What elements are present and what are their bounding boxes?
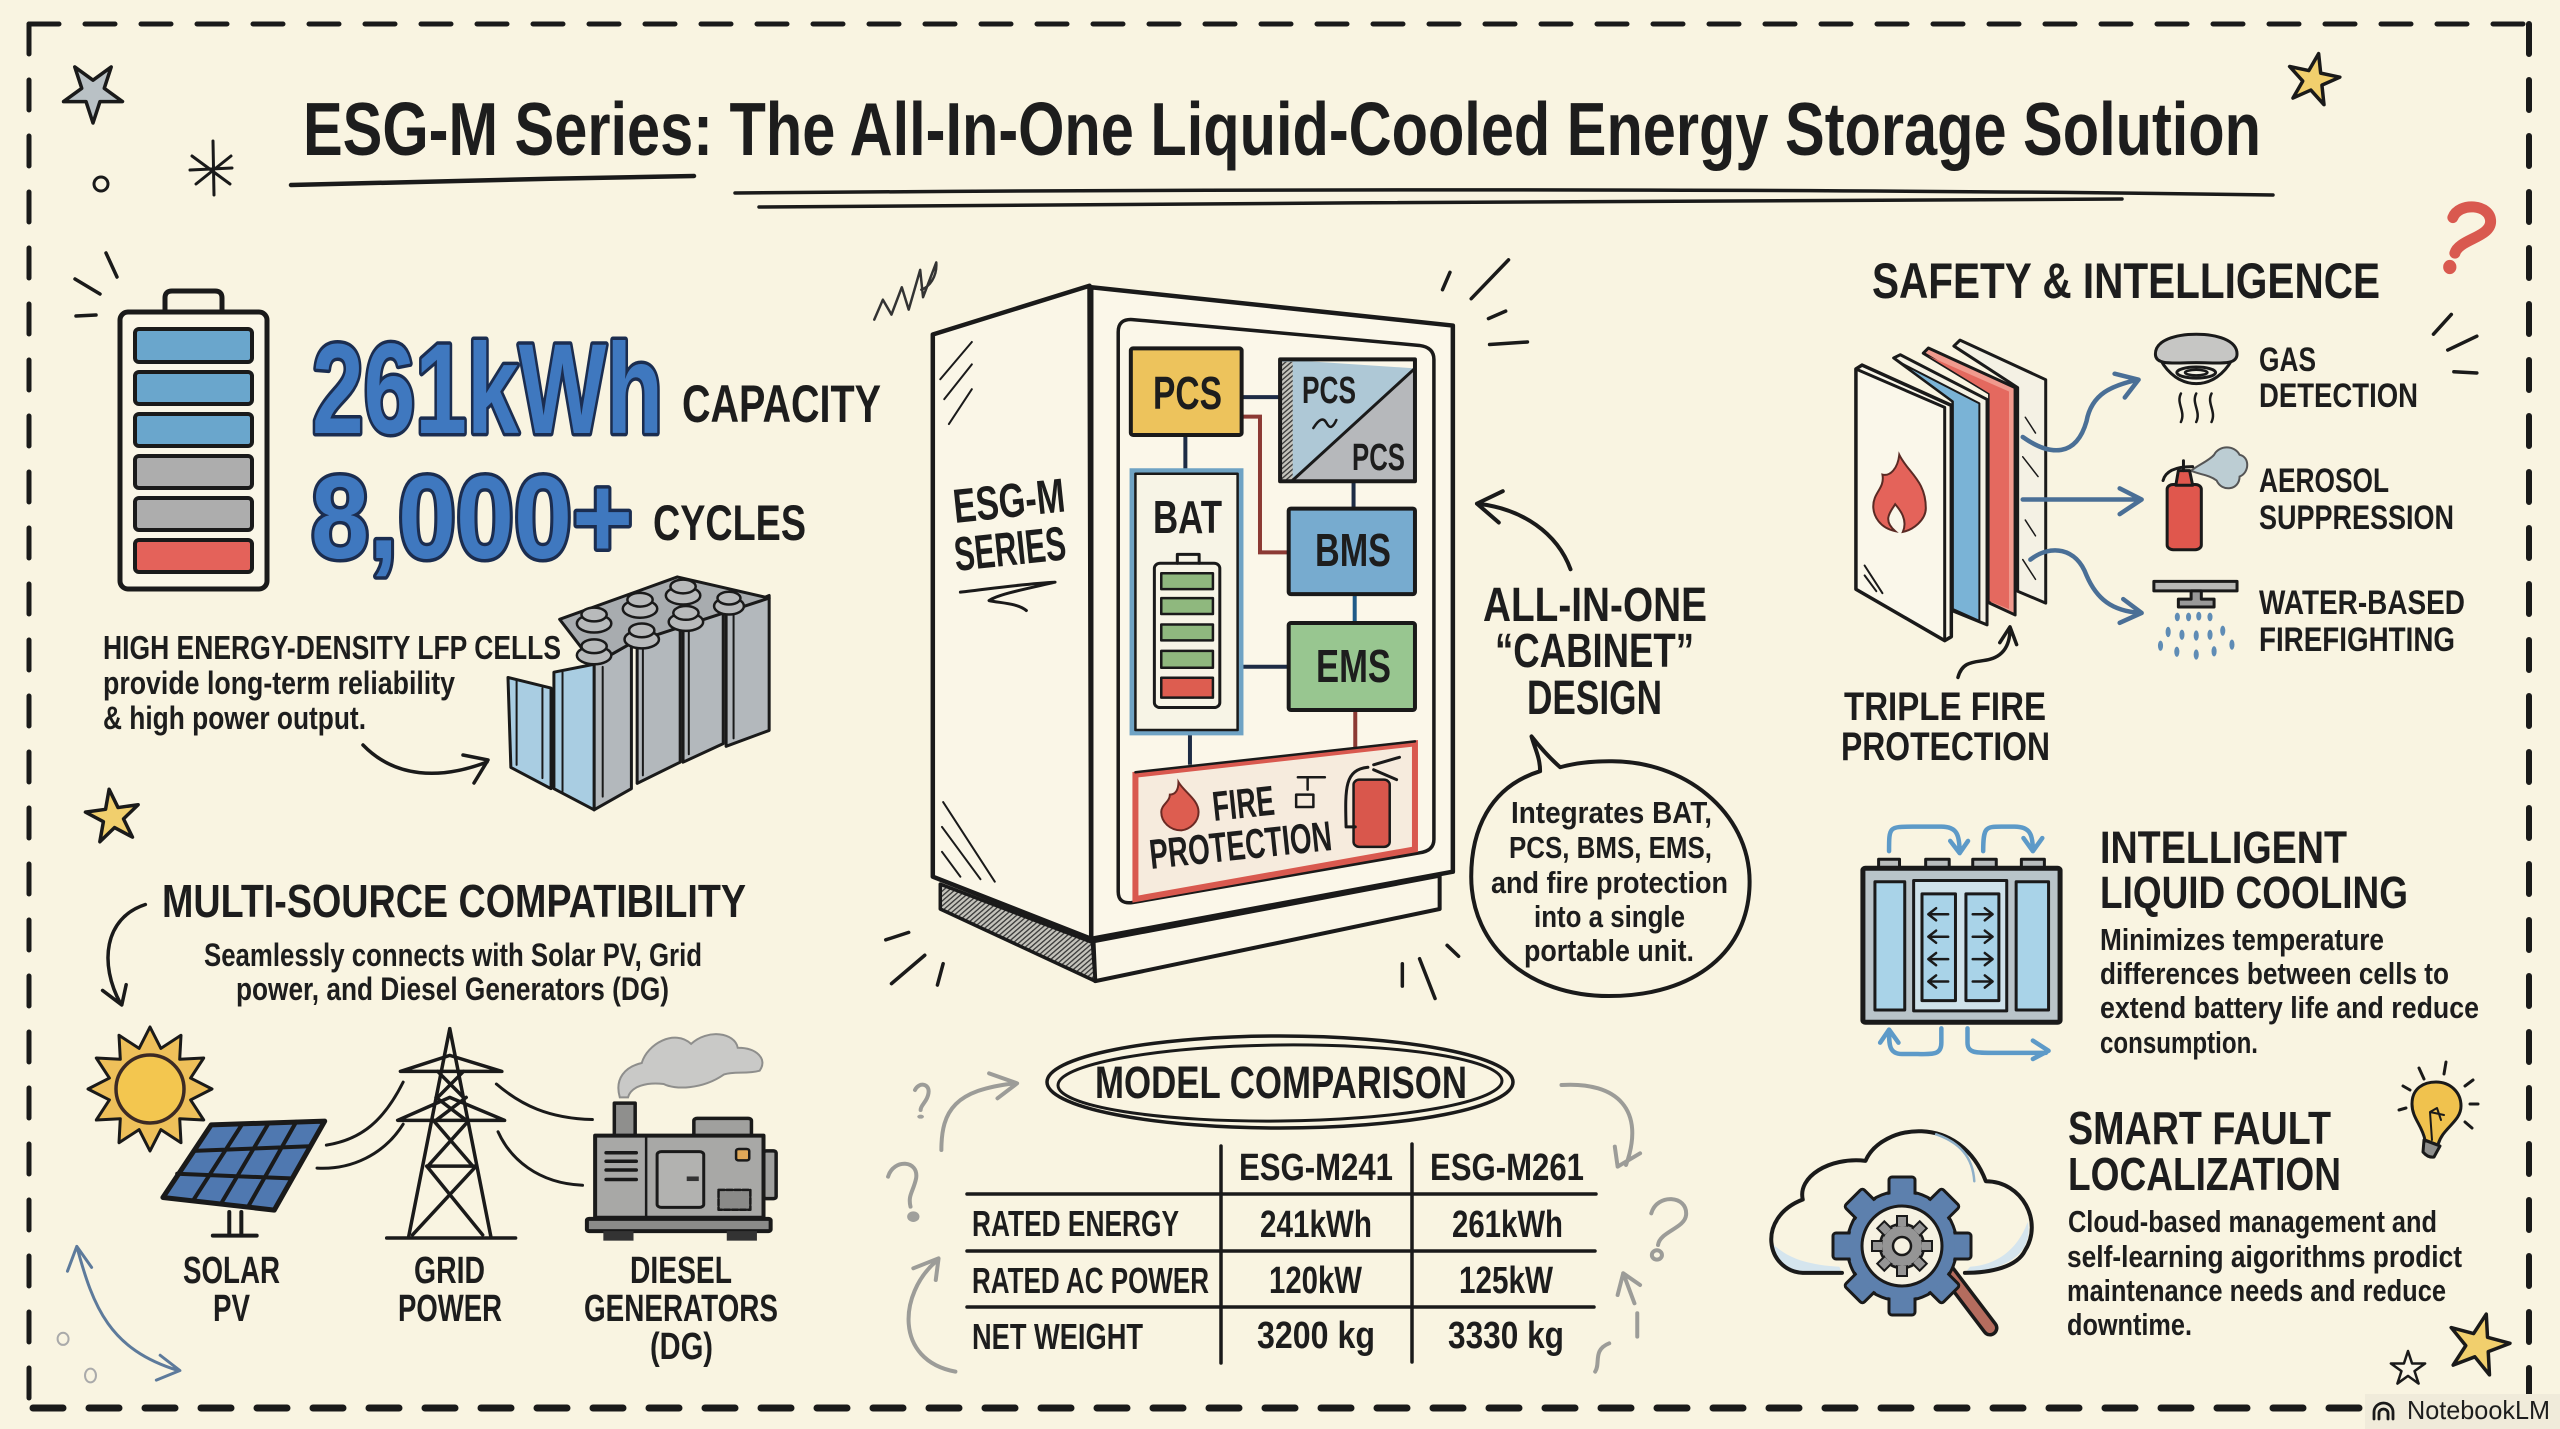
arrows: to fire protection items (2023, 374, 2142, 623)
heading: all-in-one cabinet design: ALL-IN-ONE (1483, 579, 1707, 632)
heading: all-in-one cabinet design: “CABINET” (1495, 625, 1694, 678)
stat: 8,000+ cycles: 8,000+ (311, 452, 633, 584)
labels: cabinet modules: PCS (1302, 370, 1356, 412)
label: diesel generators: DIESEL (630, 1250, 732, 1292)
labels: cabinet modules: BMS (1315, 524, 1391, 576)
table: model specs: 125kW (1459, 1260, 1553, 1302)
panel: capacity and cycles (75, 253, 881, 810)
icon: solar panel (163, 1121, 325, 1236)
heading: model comparison (1047, 1036, 1513, 1128)
text: LFP cells description (103, 629, 561, 736)
callout: speech bubble: portable unit. (1524, 933, 1694, 968)
EMS box (1289, 623, 1415, 710)
panel: safety and intelligence (1841, 253, 2477, 769)
table: model specs: 3200 kg (1257, 1315, 1375, 1357)
arrow: to cabinet (1477, 491, 1571, 569)
labels: cabinet modules: BAT (1153, 491, 1222, 543)
stat: 261kWh capacity: 261kWh (312, 318, 663, 461)
icon: yellow star bottom right (2442, 1306, 2516, 1378)
panel: multi-source compatibility (88, 875, 778, 1368)
text: fault localization description: Cloud-based management and (2068, 1204, 2437, 1239)
heading: safety & intelligence: SAFETY & INTELLIGENCE (1872, 253, 2380, 309)
heading: smart fault localization: LOCALIZATION (2068, 1148, 2341, 1200)
table: model specs: RATED ENERGY (972, 1203, 1179, 1244)
icon: water sprinkler (2154, 581, 2237, 660)
arrow: heading to sources (103, 904, 145, 1005)
icon: diesel generator (587, 1034, 776, 1241)
BAT box (1133, 471, 1240, 732)
label: diesel generators: (DG) (650, 1326, 713, 1368)
labels: cabinet modules: EMS (1316, 640, 1391, 692)
BMS box (1289, 509, 1415, 594)
callout: speech bubble: PCS, BMS, EMS, (1509, 830, 1712, 865)
icon: cloud with gear and magnifier (1771, 1131, 2032, 1328)
labels: cabinet modules (1147, 367, 1405, 878)
label: solar pv (183, 1250, 280, 1330)
heading: all-in-one cabinet design (1483, 579, 1707, 725)
text: LFP cells description: & high power output. (103, 700, 366, 736)
table: model specs: ESG-M261 (1430, 1147, 1584, 1189)
icon: aerosol extinguisher (2163, 447, 2247, 550)
heading: all-in-one cabinet design: DESIGN (1527, 672, 1662, 725)
icon: gas detector (2155, 334, 2237, 422)
icon: yellow star top right (2283, 48, 2344, 107)
label: grid power (398, 1250, 502, 1330)
watermark: NotebookLM: NotebookLM (2407, 1395, 2550, 1425)
heading: intelligent liquid cooling (2100, 822, 2408, 918)
text: liquid cooling description: consumption. (2100, 1025, 2258, 1060)
text: fault localization description (2067, 1204, 2462, 1342)
arrow: text to cells (363, 745, 488, 783)
table: model specs: RATED AC POWER (972, 1260, 1209, 1301)
text: fault localization description: downtime. (2067, 1307, 2192, 1342)
icon: sun (88, 1027, 212, 1151)
icon: yellow star left (83, 786, 143, 843)
label: triple fire protection: TRIPLE FIRE (1844, 685, 2046, 729)
title (291, 87, 2273, 207)
PCS box (1131, 348, 1242, 435)
text: seamlessly connects: power, and Diesel Generators (DG) (236, 971, 669, 1007)
label: grid power: GRID (414, 1250, 485, 1292)
decorative rays (2433, 314, 2477, 373)
icon: light bulb (2399, 1062, 2478, 1157)
decorative rays around cabinet (886, 260, 1527, 999)
icon: small circle (94, 177, 108, 191)
panel: model comparison (888, 1036, 1686, 1372)
label: solar pv: PV (213, 1288, 250, 1330)
labels: cabinet modules: FIRE (1210, 777, 1277, 830)
labels: fire protection items: GAS (2259, 341, 2316, 379)
labels: fire protection items (2259, 341, 2465, 659)
text: liquid cooling description: extend battery life and reduce (2100, 990, 2479, 1025)
label: triple fire protection: PROTECTION (1841, 725, 2050, 769)
panel: central cabinet (874, 260, 1750, 999)
stat: 8,000+ cycles: CYCLES (653, 495, 806, 551)
table: model specs (967, 1144, 1596, 1363)
labels: fire protection items: DETECTION (2259, 377, 2418, 415)
callout: speech bubble: and fire protection (1491, 865, 1728, 900)
text: liquid cooling description (2100, 922, 2479, 1060)
heading: model comparison: MODEL COMPARISON (1095, 1057, 1467, 1108)
heading: multi-source: MULTI-SOURCE COMPATIBILITY (162, 875, 746, 927)
labels: fire protection items: SUPPRESSION (2259, 499, 2454, 537)
label: ESG-M series on cabinet side (951, 470, 1069, 611)
panel: intelligent liquid cooling (1863, 822, 2479, 1060)
labels: cabinet modules: PCS (1153, 367, 1222, 419)
icon: triple fire panels (1856, 340, 2046, 641)
heading: smart fault localization (2068, 1102, 2341, 1200)
label: grid power: POWER (398, 1288, 502, 1330)
panel: smart fault localization (1771, 1062, 2478, 1342)
fire protection box (1135, 741, 1415, 899)
label: ESG-M series on cabinet side: ESG-M (951, 470, 1068, 534)
text: LFP cells description: HIGH ENERGY-DENSITY LFP CELLS (103, 629, 561, 666)
converter box (1280, 359, 1415, 481)
labels: fire protection items: WATER-BASED (2259, 584, 2465, 622)
icon: outline star bottom right (2391, 1351, 2425, 1384)
watermark: NotebookLM (2365, 1394, 2560, 1429)
icon: grey star (64, 67, 122, 123)
icon: asterisk (190, 141, 232, 195)
heading: intelligent liquid cooling: INTELLIGENT (2100, 822, 2347, 873)
heading: smart fault localization: SMART FAULT (2068, 1102, 2331, 1154)
table: model specs: NET WEIGHT (972, 1316, 1143, 1357)
callout: speech bubble: into a single (1534, 899, 1685, 934)
icon: liquid cooling module (1863, 827, 2060, 1059)
table: model specs: ESG-M241 (1239, 1147, 1393, 1189)
labels: fire protection items: AEROSOL (2259, 462, 2389, 500)
decorative grey arrows and question marks (888, 1073, 1686, 1372)
labels: cabinet modules: PROTECTION (1147, 812, 1334, 878)
text: seamlessly connects: Seamlessly connects with Solar PV, Grid (204, 937, 702, 973)
table: model specs: 241kWh (1260, 1204, 1372, 1246)
table: model specs: 120kW (1269, 1260, 1362, 1302)
table: model specs: 261kWh (1452, 1204, 1563, 1246)
callout: speech bubble: Integrates BAT, (1511, 795, 1712, 830)
heading: intelligent liquid cooling: LIQUID COOLING (2100, 867, 2408, 918)
labels: fire protection items: FIREFIGHTING (2259, 621, 2455, 659)
label: ESG-M series on cabinet side: SERIES (952, 518, 1069, 582)
icon: transmission tower (317, 1029, 592, 1238)
labels: cabinet modules: PCS (1352, 437, 1405, 479)
text: fault localization description: maintenance needs and reduce (2067, 1273, 2446, 1308)
icon: red question mark (2443, 207, 2491, 274)
table: model specs: 3330 kg (1448, 1315, 1564, 1357)
arrow: bottom-left double arrow (58, 1246, 180, 1382)
icon: battery (75, 253, 267, 589)
connectors (1185, 397, 1355, 765)
label: diesel generators: GENERATORS (584, 1288, 778, 1330)
text: seamlessly connects (204, 937, 702, 1007)
stat: 261kWh capacity: CAPACITY (682, 375, 881, 434)
text: LFP cells description: provide long-term reliability (103, 665, 455, 701)
text: fault localization description: self-learning aigorithms prodict (2067, 1239, 2462, 1274)
text: liquid cooling description: Minimizes temperature (2100, 922, 2384, 957)
text: liquid cooling description: differences between cells to (2100, 956, 2449, 991)
label: triple fire protection (1841, 627, 2050, 769)
label: solar pv: SOLAR (183, 1250, 280, 1292)
label: diesel generators (584, 1250, 778, 1368)
callout: speech bubble (1471, 736, 1750, 996)
icon: LFP cell pack (508, 577, 769, 810)
icon: cabinet body (874, 262, 1453, 981)
